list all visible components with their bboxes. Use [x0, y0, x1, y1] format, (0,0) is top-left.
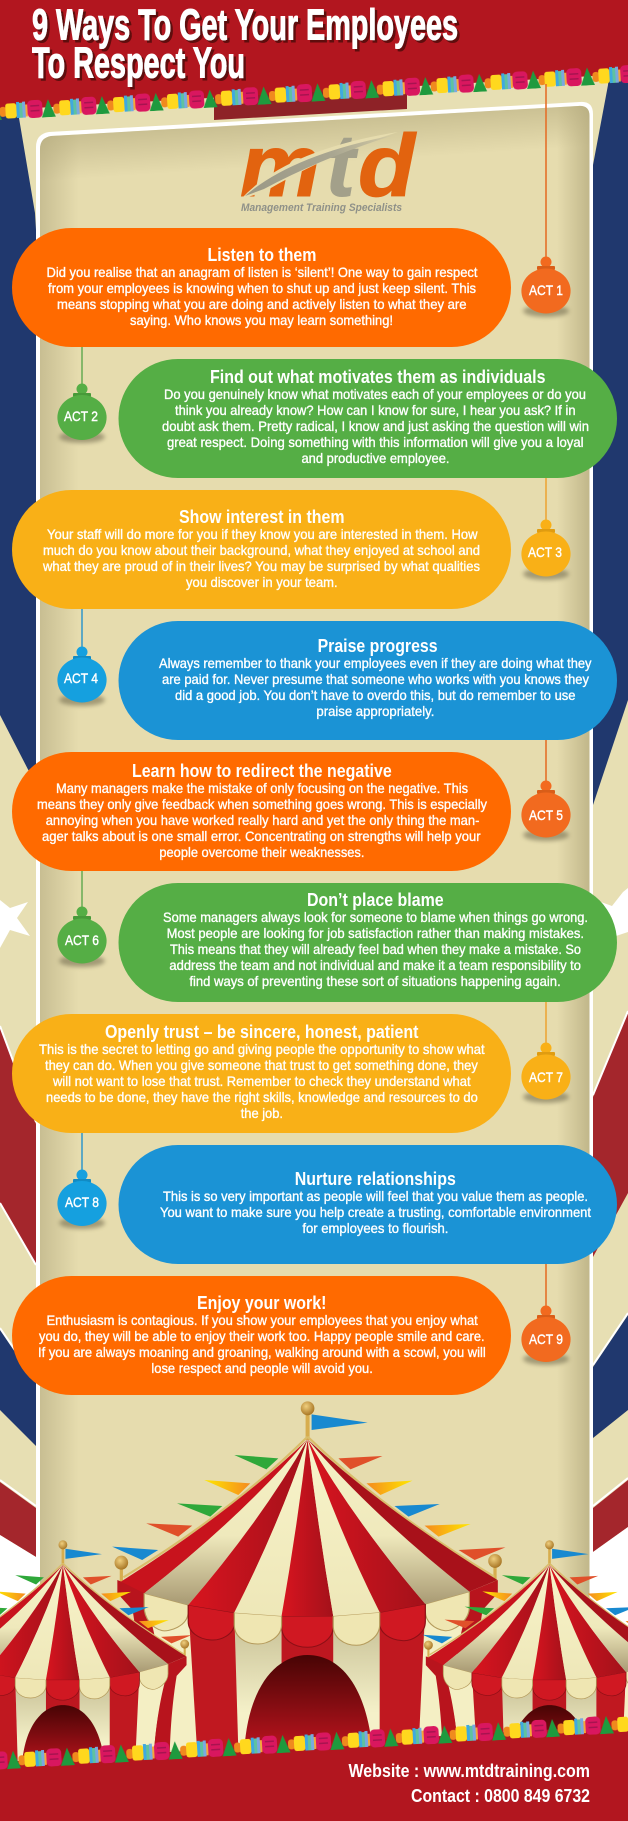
- body text: doubt ask them. Pretty radical, I know and just asking the question will win: [162, 418, 589, 434]
- tent: right: [422, 1540, 628, 1767]
- body text: needs to be done, they have the right skills, knowledge and resources to do: [46, 1089, 478, 1105]
- bubble 9: enjoy: [12, 1276, 511, 1395]
- body text: Your staff will do more for you if they know you are interested in them. How: [47, 526, 478, 542]
- ribbon under header: [214, 82, 407, 120]
- ornament: act 5: [521, 780, 571, 841]
- body text: Do you genuinely know what motivates each of your employees or do you: [164, 386, 586, 402]
- body text: This is so very important as people will feel that you value them as people.: [163, 1188, 588, 1204]
- body text: praise appropriately.: [316, 703, 434, 719]
- body text: This means that they will already feel bad when they make a mistake. So: [170, 941, 581, 957]
- logo: mtd: Management Training Specialists: [241, 202, 402, 214]
- bubble 3: interest: [12, 490, 511, 609]
- body text: annoying when you have worked really hard and yet the only thing the man-: [46, 812, 480, 828]
- logo: mtd: d: [358, 116, 417, 215]
- body text: [159, 655, 592, 719]
- bubble 8: nurture: [118, 1145, 617, 1264]
- illustration: circus tents: [0, 1401, 628, 1767]
- body text: [160, 1188, 591, 1236]
- garland: top: [0, 61, 628, 122]
- body text: [37, 780, 487, 860]
- ornament: act 9: [521, 1306, 571, 1365]
- ornament: act 2: [57, 384, 107, 443]
- body text: for employees to flourish.: [302, 1220, 448, 1236]
- heading: Nurture relationships: [295, 1169, 456, 1189]
- body text: Did you realise that an anagram of listen is ‘silent’! One way to gain respect: [46, 264, 478, 280]
- ornament: act 1: ACT 1: [529, 282, 563, 298]
- garland: bottom: [0, 1710, 628, 1770]
- bubble 4: praise: [118, 621, 617, 740]
- body text: Always remember to thank your employees even if they are doing what they: [159, 655, 592, 671]
- body text: This is the secret to letting go and giving people the opportunity to show what: [39, 1041, 485, 1057]
- tent: left: [0, 1540, 191, 1767]
- body text: [163, 909, 588, 989]
- ornament: act 1: [521, 256, 571, 317]
- contact details: Contact : 0800 849 6732: [411, 1786, 590, 1806]
- heading: Enjoy your work!: [197, 1293, 326, 1313]
- bubble 1: listen: [12, 228, 511, 347]
- body text: will not want to lose that trust. Remember to check they understand what: [52, 1073, 471, 1089]
- ornament: act 6: [57, 906, 107, 967]
- body text: means they only give feedback when something goes wrong. This is especially: [37, 796, 487, 812]
- ornament: act 5: ACT 5: [529, 807, 563, 823]
- footer band: [0, 1725, 628, 1821]
- title: To Respect You: [32, 38, 245, 88]
- heading: Don’t place blame: [307, 890, 444, 910]
- icon: right star: [601, 888, 628, 938]
- heading: Openly trust – be sincere, honest, patient: [105, 1022, 418, 1042]
- body text: are paid for. Never presume that someone who works with you knows they: [162, 671, 589, 687]
- body text: they can do. When you give someone that trust to get something done, they: [45, 1057, 478, 1073]
- body text: the job.: [241, 1105, 283, 1121]
- body text: what they are proud of in their lives? You may be surprised by what qualities: [42, 558, 480, 574]
- header band: [0, 0, 628, 110]
- body text: [162, 386, 589, 466]
- body text: [38, 1312, 486, 1376]
- body text: ager talks about is one small error. Concentrating on strengths will help your: [42, 828, 481, 844]
- body text: [39, 1041, 485, 1121]
- logo: mtd: [240, 116, 417, 215]
- body text: from your employees is knowing when to shut up and just keep silent. This: [48, 280, 476, 296]
- bubble 5: redirect: [12, 752, 511, 871]
- heading: Listen to them: [208, 245, 316, 265]
- ornament: act 3: ACT 3: [528, 544, 562, 560]
- ornament: act 4: [57, 646, 107, 706]
- heading: Find out what motivates them as individuals: [210, 367, 546, 387]
- body text: people overcome their weaknesses.: [159, 844, 364, 860]
- body text: lose respect and people will avoid you.: [151, 1360, 373, 1376]
- title: [32, 0, 458, 88]
- body text: you discover in your team.: [186, 574, 338, 590]
- ornament: act 8: [57, 1170, 107, 1229]
- icon: left star: [0, 900, 30, 948]
- body text: and productive employee.: [302, 450, 450, 466]
- contact details: [348, 1761, 590, 1806]
- body text: address the team and not individual and make it a team responsibility to: [169, 957, 581, 973]
- body text: you do, they will be able to enjoy their work too. Happy people smile and care.: [39, 1328, 485, 1344]
- body text: did a good job. You don’t have to overdo this, but do remember to use: [175, 687, 576, 703]
- ornament: act 9: ACT 9: [529, 1331, 563, 1347]
- contact details: Website : www.mtdtraining.com: [348, 1761, 590, 1781]
- body text: [42, 526, 480, 590]
- heading: Praise progress: [318, 636, 438, 656]
- body text: Enthusiasm is contagious. If you show your employees that you enjoy what: [46, 1312, 478, 1328]
- body text: Most people are looking for job satisfaction rather than making mistakes.: [167, 925, 584, 941]
- bubble 7: trust: [12, 1014, 511, 1133]
- ornament: act 3: [521, 520, 571, 580]
- ornament: act 7: ACT 7: [529, 1069, 563, 1085]
- body text: means stopping what you are doing and actively listen to what they are: [57, 296, 467, 312]
- tent: centre: [112, 1401, 505, 1750]
- heading: Show interest in them: [179, 507, 344, 527]
- body text: great respect. Doing something with this information will give you a loyal: [167, 434, 584, 450]
- body text: Many managers make the mistake of only focusing on the negative. This: [56, 780, 468, 796]
- act strings: [82, 84, 546, 1312]
- heading: Learn how to redirect the negative: [132, 761, 392, 781]
- body text: [46, 264, 478, 328]
- body text: much do you know about their background, what they enjoyed at school and: [43, 542, 480, 558]
- body text: Some managers always look for someone to blame when things go wrong.: [163, 909, 588, 925]
- logo: mtd: m: [240, 116, 320, 215]
- ornament: act 4: ACT 4: [64, 670, 98, 686]
- ornament: act 6: ACT 6: [65, 932, 99, 948]
- bubble 2: motivates: [118, 359, 617, 478]
- ornament: act 2: ACT 2: [64, 408, 98, 424]
- ornament: act 7: [521, 1042, 571, 1103]
- ornament: act 8: ACT 8: [65, 1194, 99, 1210]
- body text: saying. Who knows you may learn something!: [130, 312, 393, 328]
- body text: find ways of preventing these sort of situations happening again.: [189, 973, 561, 989]
- bubble 6: blame: [118, 883, 617, 1002]
- body text: If you are always moaning and groaning, walking around with a scowl, you will: [38, 1344, 486, 1360]
- body text: think you already know? How can I know for sure, I hear you ask? If in: [175, 402, 576, 418]
- body text: You want to make sure you help create a trusting, comfortable environment: [160, 1204, 591, 1220]
- logo: mtd: t: [326, 116, 359, 215]
